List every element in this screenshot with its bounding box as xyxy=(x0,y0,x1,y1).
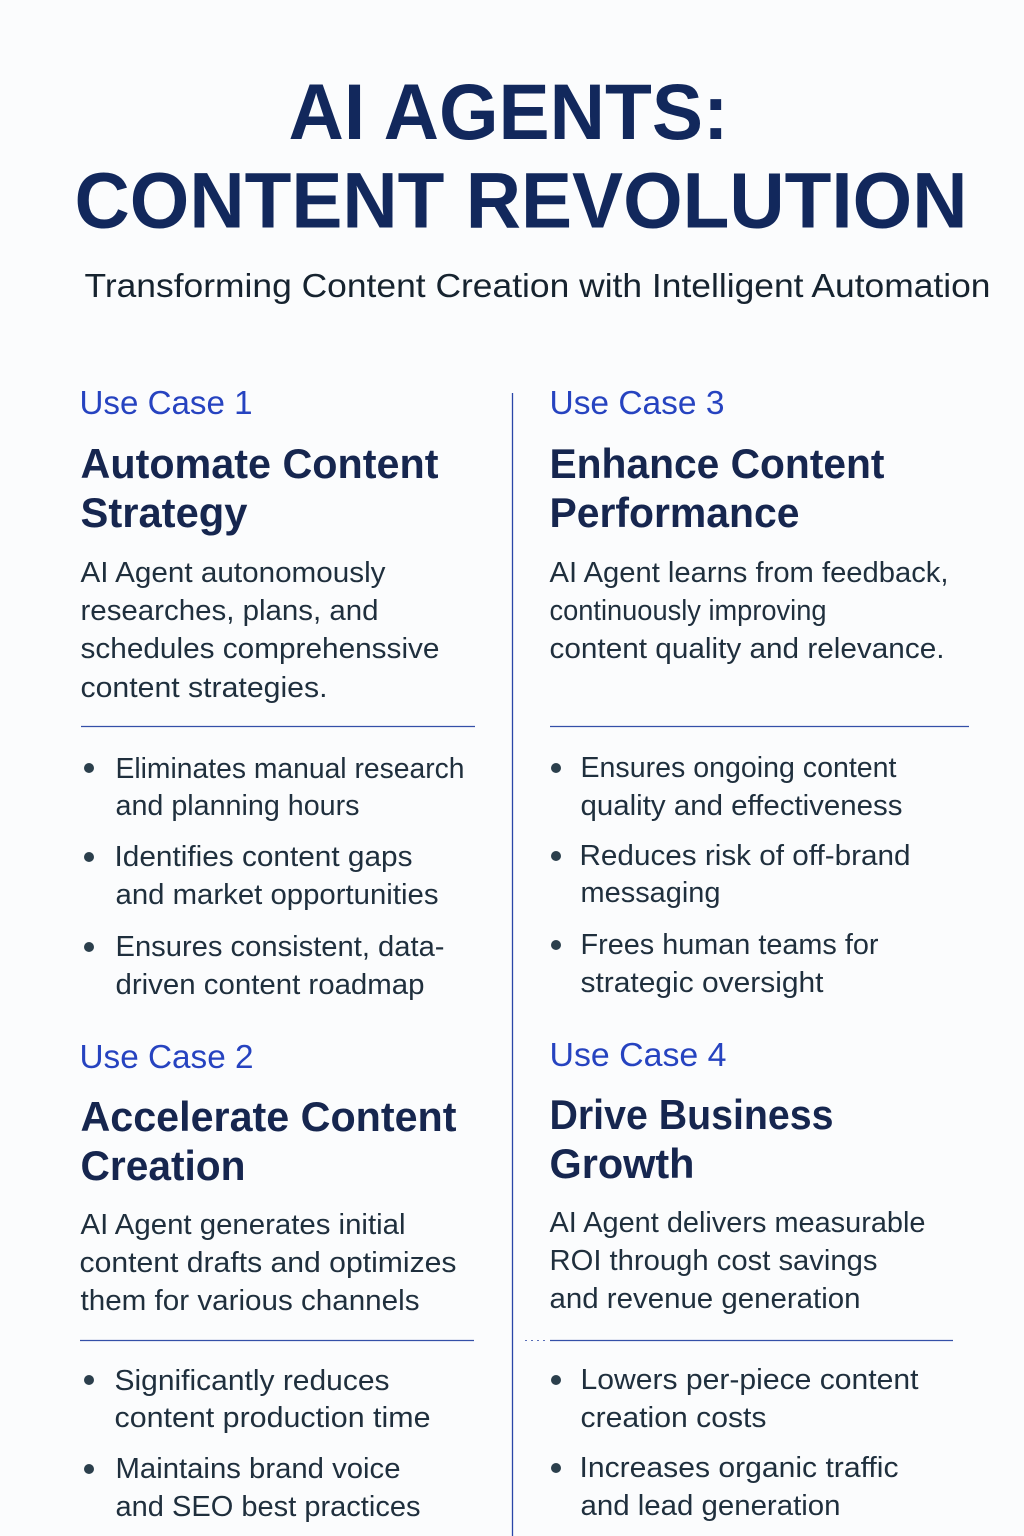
label: use case 2: Use Case 2 xyxy=(80,1038,253,1075)
description: use case 2: content drafts and optimizes xyxy=(80,1247,457,1279)
bullet list: use case 3 xyxy=(551,752,910,999)
bullet list: use case 3: Ensures ongoing content xyxy=(580,752,896,784)
bullet list: use case 2: Significantly reduces xyxy=(114,1365,390,1397)
description: use case 1: content strategies. xyxy=(80,672,328,704)
heading: enhance content performance: Performance xyxy=(550,489,800,536)
description: use case 1: AI Agent autonomously xyxy=(80,557,386,589)
heading: enhance content performance xyxy=(550,440,885,536)
description: use case 2: AI Agent generates initial xyxy=(80,1209,406,1241)
panel: use case 3 xyxy=(550,384,969,999)
heading: accelerate content creation: Creation xyxy=(80,1142,246,1189)
bullet list: use case 3: quality and effectiveness xyxy=(580,790,902,822)
heading: drive business growth xyxy=(550,1091,834,1187)
description: use case 1 xyxy=(80,557,440,704)
bullet list: use case 4: Increases organic traffic xyxy=(580,1452,898,1484)
panel: use case 4 xyxy=(525,1036,953,1522)
bullet list: use case 1: and market opportunities xyxy=(116,879,438,911)
bullet list: use case 1: Identifies content gaps xyxy=(114,841,412,873)
heading: automate content strategy: Automate Content xyxy=(80,440,439,487)
bullet list: use case 4: Lowers per-piece content xyxy=(580,1364,918,1396)
description: use case 4: AI Agent delivers measurable xyxy=(550,1207,926,1239)
subtitle: Transforming Content Creation with Intelligent Automation xyxy=(84,267,990,304)
description: use case 1: schedules comprehenssive xyxy=(80,633,440,665)
heading: accelerate content creation xyxy=(80,1093,457,1189)
bullet list: use case 2: content production time xyxy=(114,1402,430,1434)
bullet list: use case 4: and lead generation xyxy=(580,1490,840,1522)
column divider xyxy=(512,393,514,1536)
panel: use case 1 xyxy=(80,384,475,1001)
heading: automate content strategy: Strategy xyxy=(80,489,248,536)
description: use case 3: continuously improving xyxy=(550,595,826,627)
title: AI AGENTS: xyxy=(288,67,728,156)
bullet list: use case 4 xyxy=(551,1364,918,1522)
bullet list: use case 2: Maintains brand voice xyxy=(116,1453,400,1485)
bullet list: use case 1: Eliminates manual research xyxy=(116,753,464,785)
bullet list: use case 1: Ensures consistent, data- xyxy=(116,931,445,963)
description: use case 4 xyxy=(550,1207,926,1315)
bullet list: use case 1: driven content roadmap xyxy=(116,969,424,1001)
description: use case 4: and revenue generation xyxy=(550,1283,860,1315)
title: CONTENT REVOLUTION xyxy=(74,156,968,244)
label: use case 1: Use Case 1 xyxy=(80,384,252,421)
heading: enhance content performance: Enhance Content xyxy=(550,440,885,487)
bullet list: use case 1: and planning hours xyxy=(116,790,360,822)
description: use case 2 xyxy=(80,1209,457,1317)
heading: drive business growth: Drive Business xyxy=(550,1091,834,1138)
description: use case 3: AI Agent learns from feedback, xyxy=(550,557,948,589)
bullet list: use case 2: and SEO best practices xyxy=(116,1491,420,1523)
bullet list: use case 1 xyxy=(84,753,464,1001)
heading: drive business growth: Growth xyxy=(550,1140,694,1187)
bullet list: use case 3: Reduces risk of off-brand xyxy=(580,840,910,872)
bullet list: use case 3: messaging xyxy=(580,877,720,909)
title xyxy=(74,67,968,244)
heading: automate content strategy xyxy=(80,440,439,536)
bullet list: use case 2 xyxy=(84,1365,430,1523)
bullet list: use case 3: strategic oversight xyxy=(580,967,824,999)
heading: accelerate content creation: Accelerate Content xyxy=(80,1093,457,1140)
bullet list: use case 4: creation costs xyxy=(580,1402,766,1434)
panel: use case 2 xyxy=(80,1038,474,1523)
label: use case 4: Use Case 4 xyxy=(550,1036,726,1073)
description: use case 2: them for various channels xyxy=(80,1285,420,1317)
label: use case 3: Use Case 3 xyxy=(550,384,724,421)
description: use case 3 xyxy=(550,557,948,665)
description: use case 4: ROI through cost savings xyxy=(550,1245,878,1277)
description: use case 1: researches, plans, and xyxy=(80,595,378,627)
description: use case 3: content quality and relevance. xyxy=(550,633,944,665)
bullet list: use case 3: Frees human teams for xyxy=(580,929,879,961)
